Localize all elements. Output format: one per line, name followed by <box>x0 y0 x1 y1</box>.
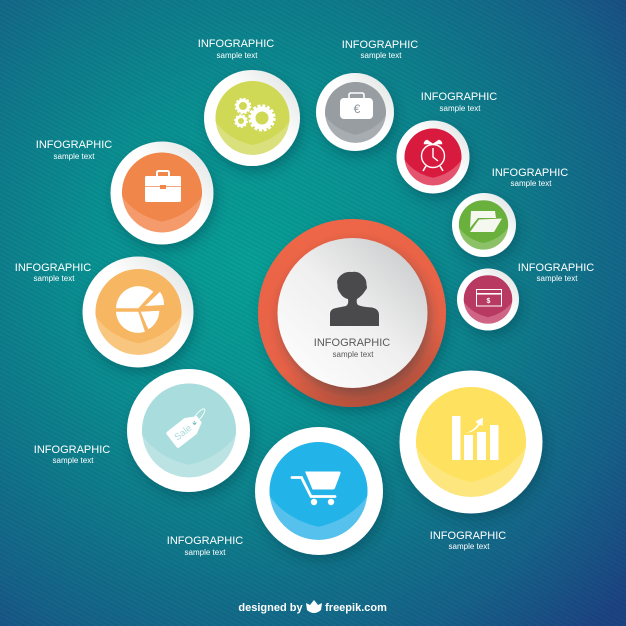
label: pie chart: sample text <box>34 274 75 283</box>
label: euro case: sample text <box>361 51 402 60</box>
label: dollar card: sample text <box>537 274 578 283</box>
icon: euro case: € <box>354 102 361 116</box>
footer credit <box>238 600 387 614</box>
icon: shopping cart <box>292 472 341 505</box>
label: shopping cart: sample text <box>185 548 226 557</box>
label: bar chart: INFOGRAPHIC <box>430 530 506 542</box>
panel: dollar card <box>457 268 519 330</box>
label: folder: sample text <box>511 179 552 188</box>
label: dollar card <box>518 262 594 283</box>
label: sale tag: INFOGRAPHIC <box>34 444 110 456</box>
label: clock <box>421 91 497 113</box>
orange ring <box>258 219 446 407</box>
label: shopping cart <box>167 535 243 557</box>
heading: center: INFOGRAPHIC <box>314 337 390 349</box>
icon: gears <box>235 99 274 130</box>
label: briefcase <box>36 139 112 161</box>
icon: person silhouette <box>330 272 379 326</box>
footer credit: designed by <box>238 602 303 614</box>
label: gears <box>198 38 274 60</box>
icon: sale tag: Sale <box>172 423 194 443</box>
panel: shopping cart <box>255 427 383 555</box>
icon: bar chart <box>452 416 498 460</box>
label: euro case: INFOGRAPHIC <box>342 39 418 51</box>
label: briefcase: sample text <box>54 152 95 161</box>
label: pie chart: INFOGRAPHIC <box>15 262 91 274</box>
label: sale tag: sample text <box>53 456 94 465</box>
icon: folder <box>470 211 502 232</box>
label: bar chart: sample text <box>449 542 490 551</box>
label: euro case <box>342 39 418 60</box>
panel: briefcase <box>110 142 214 244</box>
panel: pie chart <box>82 256 194 368</box>
central circle: person <box>258 219 446 407</box>
label: sale tag <box>34 444 110 465</box>
icon: crown logo <box>306 600 322 613</box>
label: clock: INFOGRAPHIC <box>421 91 497 103</box>
label: pie chart <box>15 262 91 283</box>
panel: bar chart <box>400 370 542 514</box>
panel: clock <box>396 120 470 194</box>
icon: briefcase <box>145 171 181 202</box>
white disc <box>278 238 428 388</box>
label: dollar card: INFOGRAPHIC <box>518 262 594 274</box>
label: gears: INFOGRAPHIC <box>198 38 274 50</box>
label: folder <box>492 167 568 188</box>
icon: clock <box>422 140 444 171</box>
footer credit: freepik.com <box>325 602 387 614</box>
icon: dollar card: $ <box>487 298 491 305</box>
panel: euro case <box>316 73 394 151</box>
panel: gears <box>204 70 300 166</box>
panel: folder <box>452 193 516 257</box>
label: briefcase: INFOGRAPHIC <box>36 139 112 151</box>
label: bar chart <box>430 530 506 551</box>
icon: pie chart <box>116 286 164 333</box>
label: gears: sample text <box>217 51 258 60</box>
text: center sample: sample text <box>333 350 374 359</box>
panel: sale tag <box>127 369 250 492</box>
label: shopping cart: INFOGRAPHIC <box>167 535 243 547</box>
label: folder: INFOGRAPHIC <box>492 167 568 179</box>
label: clock: sample text <box>440 104 481 113</box>
